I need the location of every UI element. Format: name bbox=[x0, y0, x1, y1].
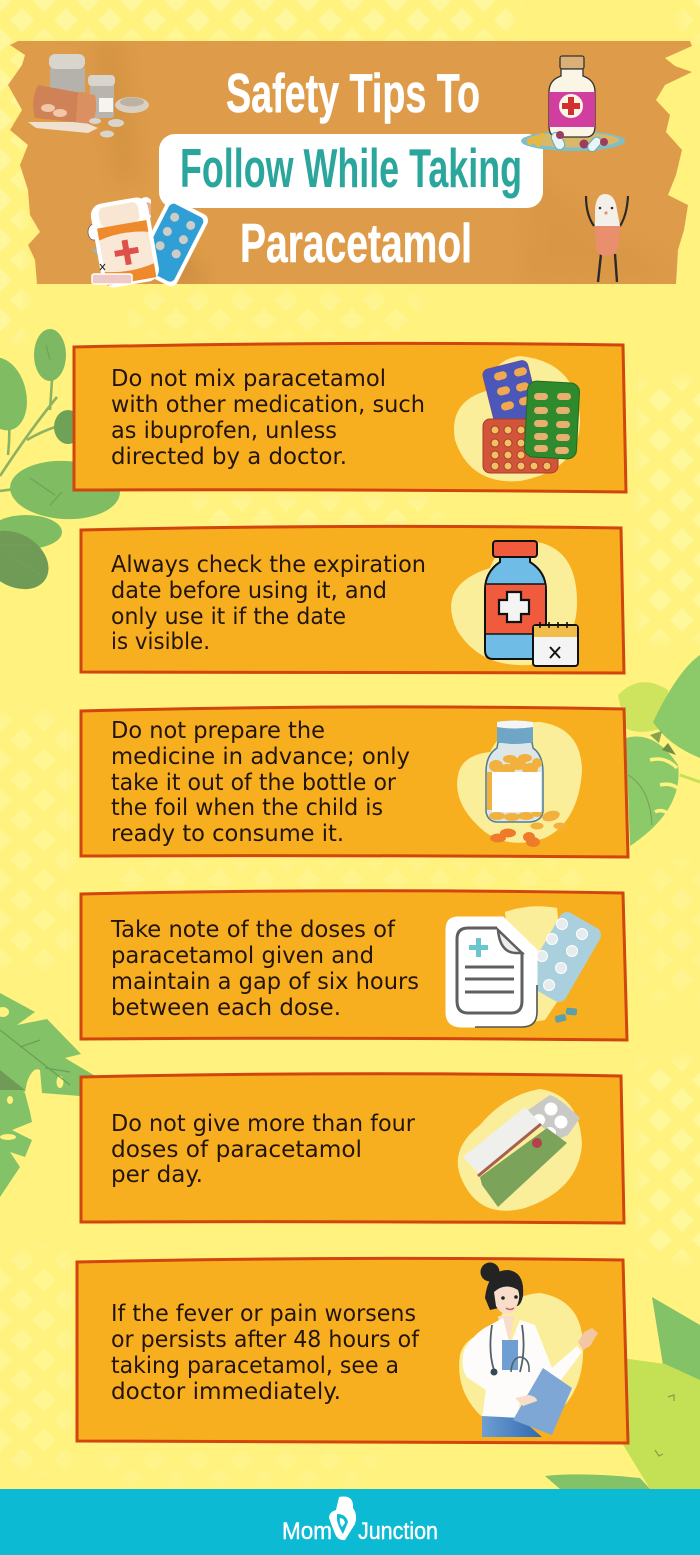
icon: bottle and calendar bbox=[451, 541, 578, 666]
card 3 text: the foil when the child is bbox=[111, 795, 383, 821]
card 5 text: doses of paracetamol bbox=[111, 1137, 362, 1163]
icon: pill bottles spilled bbox=[28, 54, 149, 138]
card 6 text bbox=[111, 1301, 420, 1405]
right bottom leaves bbox=[545, 1297, 700, 1489]
icon: blister packs bbox=[454, 356, 580, 481]
card 3 text: Do not prepare the bbox=[111, 718, 325, 744]
footer bar bbox=[0, 1489, 700, 1555]
card 4: note the doses bbox=[81, 891, 627, 1040]
icon: happy pill character bbox=[586, 194, 628, 282]
icon: bottle of yellow tablets bbox=[457, 720, 582, 847]
icon: orange bottle and blue blister sticker bbox=[88, 196, 210, 289]
card 6 text: If the fever or pain worsens bbox=[111, 1301, 416, 1327]
card 2 text: is visible. bbox=[111, 629, 210, 655]
logo: MomJunction: Mom bbox=[282, 1518, 332, 1545]
card 5 text: per day. bbox=[111, 1162, 203, 1188]
title highlight: Follow While Taking: Follow While Taking bbox=[180, 137, 522, 199]
left branch of leaves bbox=[0, 329, 121, 601]
title highlight: Follow While Taking bbox=[159, 134, 543, 208]
card 4 text: Take note of the doses of bbox=[110, 917, 396, 943]
left bottom monstera leaf bbox=[0, 993, 97, 1197]
icon: tablet pack bbox=[458, 1089, 582, 1211]
card 4 text: between each dose. bbox=[111, 995, 341, 1021]
card 5 text bbox=[111, 1111, 416, 1188]
card 5 text: Do not give more than four bbox=[111, 1111, 416, 1137]
card 3: do not prepare in advance bbox=[81, 707, 628, 857]
card 6 text: doctor immediately. bbox=[111, 1379, 341, 1405]
card 4 text bbox=[110, 917, 419, 1021]
card 1 text: Do not mix paracetamol bbox=[111, 366, 386, 392]
card 1 text bbox=[111, 366, 425, 470]
card 3 text: medicine in advance; only bbox=[111, 744, 410, 770]
card 4 text: paracetamol given and bbox=[111, 943, 374, 969]
right monstera leaves bbox=[618, 655, 700, 846]
card 3 text bbox=[111, 718, 410, 847]
card 4 text: maintain a gap of six hours bbox=[111, 969, 419, 995]
card 1 text: with other medication, such bbox=[111, 392, 425, 418]
card 1: do not mix medication bbox=[74, 343, 626, 492]
logo: MomJunction: Junction bbox=[358, 1518, 438, 1545]
icon: medical note and blister bbox=[446, 906, 604, 1027]
card 3 text: ready to consume it. bbox=[111, 821, 344, 847]
title: Safety Tips To: Safety Tips To bbox=[226, 62, 480, 124]
card 5: no more than four doses bbox=[81, 1074, 624, 1223]
icon: pink syrup bottle and plate of pills bbox=[521, 56, 625, 153]
card 2 text: only use it if the date bbox=[111, 604, 346, 630]
icon: doctor with clipboard bbox=[459, 1262, 598, 1437]
card 6 text: or persists after 48 hours of bbox=[111, 1327, 420, 1353]
card 1 text: directed by a doctor. bbox=[111, 444, 347, 470]
card 3 text: take it out of the bottle or bbox=[111, 770, 397, 796]
card 1 text: as ibuprofen, unless bbox=[111, 418, 337, 444]
banner: torn paper bbox=[8, 41, 692, 284]
card 6 text: taking paracetamol, see a bbox=[111, 1353, 399, 1379]
card 2: check expiration date bbox=[81, 526, 624, 673]
card 2 text: date before using it, and bbox=[111, 578, 387, 604]
logo: MomJunction bbox=[282, 1496, 438, 1545]
card 6: see a doctor bbox=[77, 1258, 628, 1443]
title: Paracetamol: Paracetamol bbox=[240, 212, 472, 274]
card 2 text: Always check the expiration bbox=[111, 552, 426, 578]
card 2 text bbox=[111, 552, 426, 655]
